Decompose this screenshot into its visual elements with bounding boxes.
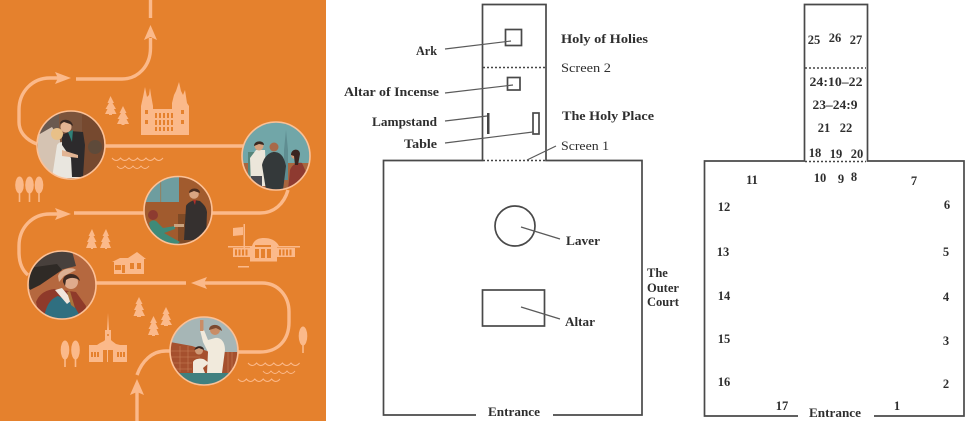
chapter numbers: 23–24:9 <box>812 98 858 112</box>
label: Altar of Incense: Altar of Incense <box>344 85 439 99</box>
chapter numbers: 14 <box>718 289 731 303</box>
chapter numbers: 19 <box>830 147 842 161</box>
chapter numbers: 16 <box>718 375 730 389</box>
furniture <box>482 30 544 326</box>
chapter numbers: 18 <box>809 146 821 160</box>
icon: pine trees lower <box>134 297 172 336</box>
label: Holy of Holies: Holy of Holies <box>561 32 648 46</box>
chapter numbers: 12 <box>718 200 730 214</box>
panel: orange path illustration <box>0 0 326 421</box>
chapter numbers: 6 <box>944 198 950 212</box>
label: Screen 1: Screen 1 <box>561 139 609 153</box>
scene: wedding couple <box>37 111 106 179</box>
chapter numbers: 22 <box>840 121 852 135</box>
chapter numbers: 10 <box>814 171 826 185</box>
label: The Holy Place: The Holy Place <box>562 109 654 123</box>
scene: blessing of a man <box>28 251 96 320</box>
label: Entrance: Entrance <box>488 405 540 419</box>
chapter numbers: 7 <box>911 174 917 188</box>
chapter numbers: 27 <box>850 33 862 47</box>
scene: group of three people <box>242 122 310 190</box>
scene: woman at table with man <box>144 176 212 246</box>
plan outline <box>384 4 642 415</box>
icon: temple <box>141 82 189 135</box>
chapter numbers: 24:10–22 <box>810 75 862 89</box>
chapter numbers <box>717 31 950 413</box>
icon: pine trees middle <box>86 229 111 249</box>
label: Entrance: Entrance <box>809 406 861 420</box>
chapter numbers: 17 <box>776 399 788 413</box>
label: The Outer Court: The <box>647 266 668 280</box>
chapter numbers: 26 <box>829 31 841 45</box>
chapter numbers: 21 <box>818 121 830 135</box>
label: The Outer Court: Court <box>647 295 680 309</box>
screen lines <box>483 68 545 160</box>
label: Ark: Ark <box>416 44 437 58</box>
chapter numbers: 20 <box>851 147 863 161</box>
chapter numbers: 5 <box>943 245 949 259</box>
leader lines <box>445 41 560 319</box>
chapter numbers: 25 <box>808 33 820 47</box>
icon: oval trees near church <box>61 326 307 367</box>
chapter numbers: 9 <box>838 172 844 186</box>
chapter numbers: 1 <box>894 399 900 413</box>
chapter numbers: 2 <box>943 377 949 391</box>
label: Table: Table <box>404 137 437 151</box>
icon: waves lower <box>238 363 300 382</box>
label: Screen 2: Screen 2 <box>561 61 611 75</box>
chapter numbers: 4 <box>943 290 950 304</box>
scene: baptism <box>170 317 238 385</box>
label: Altar: Altar <box>565 315 595 329</box>
screen lines <box>805 68 866 162</box>
panel: numbered temple plan <box>704 4 964 420</box>
chapter numbers: 15 <box>718 332 730 346</box>
label: Lampstand: Lampstand <box>372 115 437 129</box>
icon: church <box>89 313 127 362</box>
chapter numbers: 3 <box>943 334 949 348</box>
icon: house <box>112 252 146 274</box>
icon: school with flag <box>228 224 300 268</box>
label: Laver: Laver <box>566 234 600 248</box>
chapter numbers: 8 <box>851 170 857 184</box>
icon: oval trees left <box>15 176 43 202</box>
winding path with arrows <box>19 0 289 421</box>
plan outline <box>704 4 964 416</box>
icon: pine trees near temple <box>105 96 129 125</box>
icon: waves upper <box>112 158 163 168</box>
chapter numbers: 11 <box>746 173 758 187</box>
chapter numbers: 13 <box>717 245 729 259</box>
label: The Outer Court: Outer <box>647 281 679 295</box>
panel: labelled temple plan <box>344 4 680 419</box>
